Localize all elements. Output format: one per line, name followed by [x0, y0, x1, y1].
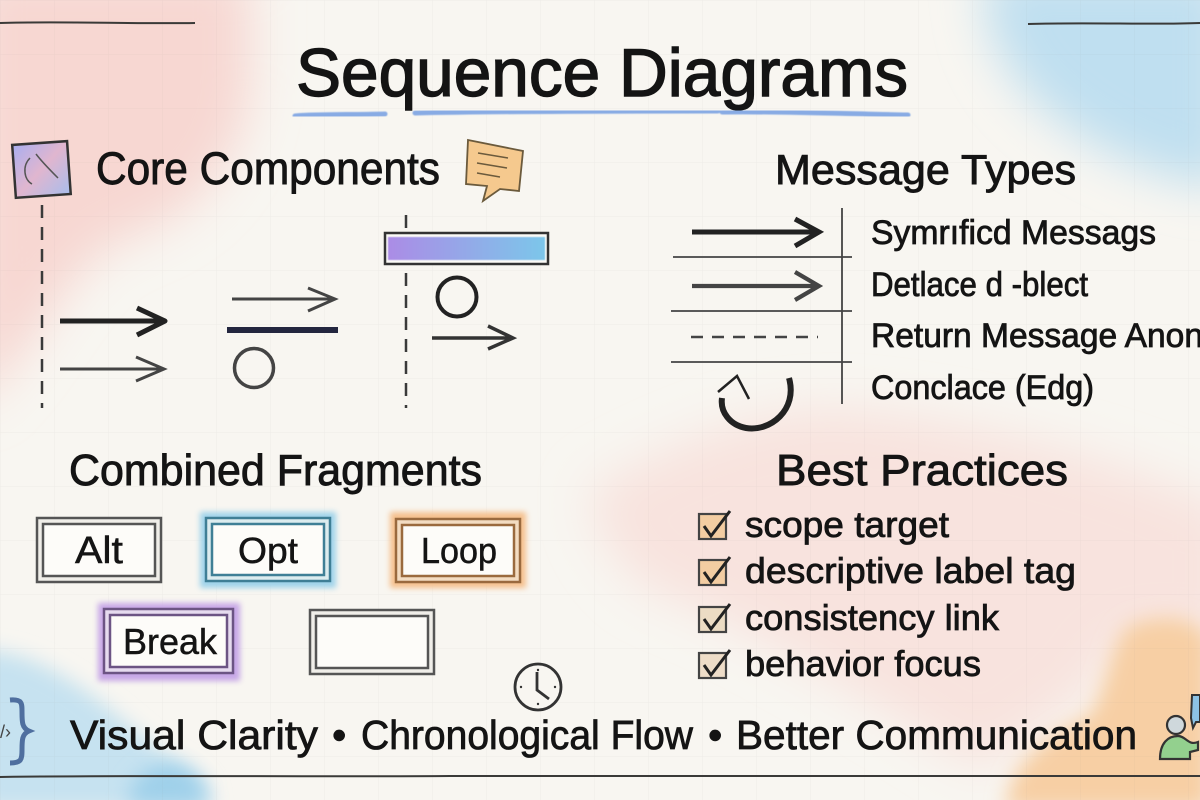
panel: core components — [12, 140, 548, 408]
label: Symrıficd Messags — [871, 214, 1156, 252]
lifeline right — [405, 215, 407, 408]
panel: best practices — [699, 446, 1076, 684]
footer tagline: Visual Clarity — [70, 712, 319, 758]
icon: lifeline actor card — [12, 141, 71, 198]
lifeline header bar — [385, 233, 548, 264]
fragment: empty — [310, 610, 434, 674]
fragment: loop: Loop — [421, 530, 497, 571]
arrow: solid thick — [60, 308, 165, 335]
fragment: opt — [200, 512, 336, 588]
fragment: opt: Opt — [238, 530, 298, 571]
arrow: right — [432, 326, 513, 349]
arrow: thin — [60, 357, 164, 381]
fragment: break — [98, 603, 240, 681]
icon: clock — [515, 664, 561, 710]
label: Conclace (Edg) — [871, 369, 1094, 407]
activation bar dark — [227, 327, 338, 333]
footer tagline: Better Communication — [736, 712, 1137, 758]
panel: message types — [671, 146, 1200, 428]
heading: core components: Core Components — [96, 143, 440, 194]
heading: best practices: Best Practices — [776, 446, 1068, 495]
label: Return Message Anon — [871, 317, 1200, 355]
check item: behavior focus: behavior focus — [745, 643, 981, 684]
label: Detlace d -blect — [871, 266, 1088, 304]
fragment: loop — [390, 512, 526, 588]
check item: consistency link: consistency link — [745, 597, 1000, 638]
panel: combined fragments — [37, 446, 526, 681]
footer tagline: Chronological Flow — [361, 712, 693, 758]
footer tagline: • — [332, 712, 346, 758]
icon: note speech bubble — [466, 140, 523, 201]
heading: combined fragments: Combined Fragments — [69, 446, 482, 495]
footer tagline — [70, 712, 1137, 758]
arrow: return dashed — [691, 336, 818, 338]
icon: person with speech bubble — [1160, 695, 1200, 759]
check item: descriptive label tag: descriptive label tag — [745, 550, 1076, 591]
footer tagline: • — [708, 712, 722, 758]
lifeline left — [41, 205, 43, 408]
icon: code braces: /› — [0, 722, 11, 742]
table rules — [671, 208, 852, 404]
arrow: detailed — [692, 272, 819, 300]
fragment: alt — [37, 518, 161, 582]
circle lower — [234, 348, 274, 388]
circle upper — [438, 278, 476, 316]
fragment: break: Break — [123, 621, 218, 662]
icon: self message loop — [718, 376, 791, 428]
title underline — [295, 111, 908, 116]
fragment: alt: Alt — [75, 530, 123, 572]
heading: message types: Message Types — [775, 146, 1076, 193]
check item: scope target: scope target — [745, 504, 949, 545]
arrow: synchronous — [692, 219, 819, 246]
title: Sequence Diagrams — [296, 35, 908, 111]
icon: code braces — [0, 700, 29, 763]
arrow: upper middle — [232, 288, 335, 311]
